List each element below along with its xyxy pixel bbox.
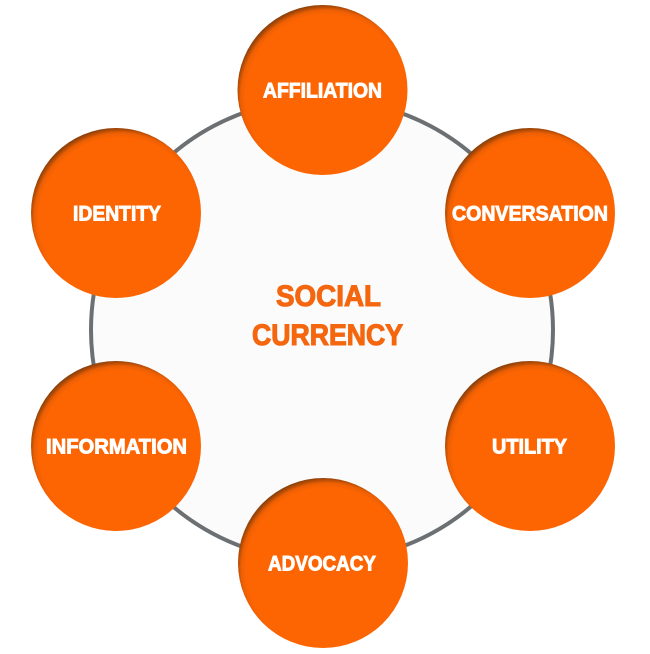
node: utility [445, 361, 615, 531]
node: affiliation [238, 5, 408, 175]
node: conversation: CONVERSATION [452, 202, 608, 226]
node: conversation [445, 128, 615, 298]
node: advocacy: ADVOCACY [268, 552, 376, 576]
central title: social currency: CURRENCY [252, 319, 403, 352]
central title: social currency [252, 280, 403, 352]
node: utility: UTILITY [492, 436, 567, 458]
node: affiliation: AFFILIATION [263, 80, 382, 102]
node: identity: IDENTITY [73, 202, 161, 226]
node: information: INFORMATION [46, 436, 187, 458]
node: identity [31, 128, 201, 298]
node: information [31, 361, 201, 531]
central title: social currency: SOCIAL [276, 280, 381, 313]
node: advocacy [238, 478, 408, 648]
central ring panel [91, 99, 553, 561]
